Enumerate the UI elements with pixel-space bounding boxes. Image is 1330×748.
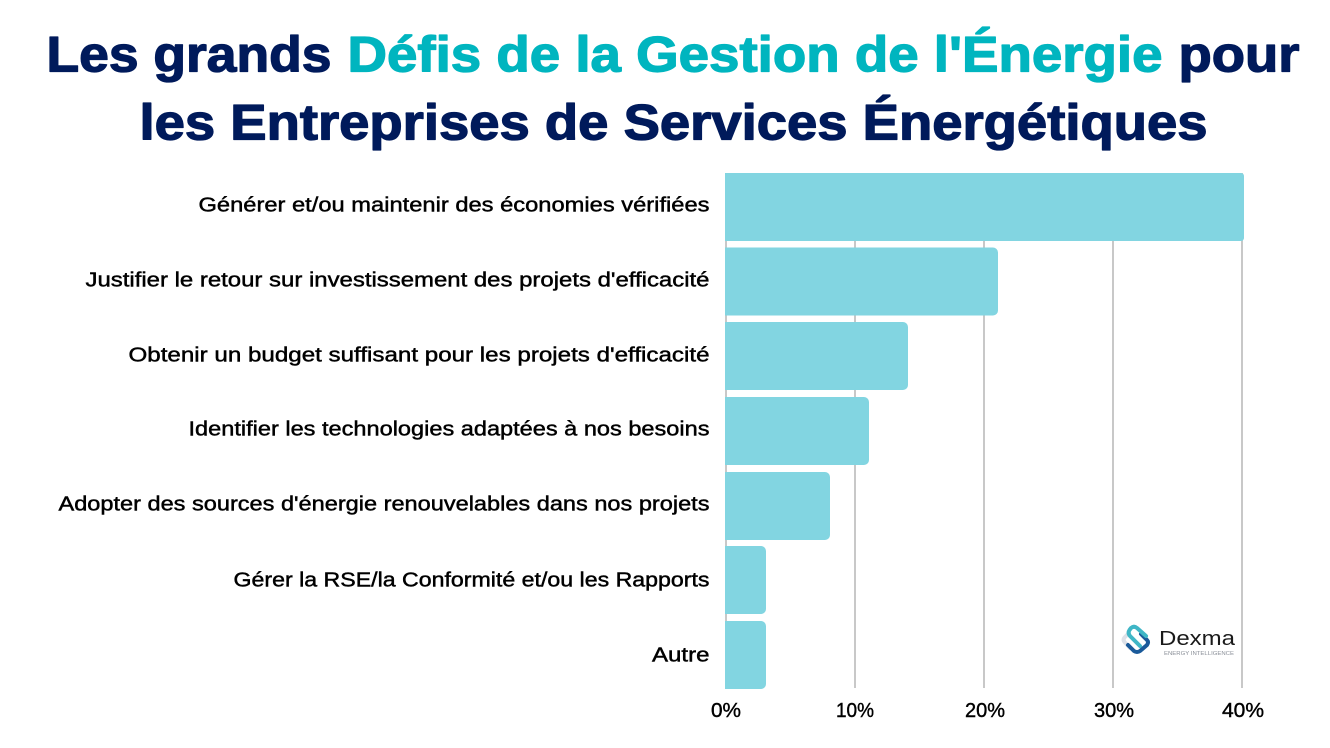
- logo wordmark: Dexma: [1159, 628, 1236, 650]
- title: pour: [1178, 26, 1300, 82]
- logo tagline: ENERGY INTELLIGENCE: [1164, 651, 1235, 657]
- title: Les grands: [46, 26, 332, 82]
- category labels: Justifier le retour sur investissement des projets d'efficacité: [86, 270, 710, 292]
- category labels: Générer et/ou maintenir des économies vérifiées: [198, 194, 710, 216]
- axis labels: 0%: [711, 700, 741, 722]
- bar chart: [58, 173, 1264, 722]
- axis labels: 10%: [836, 700, 874, 722]
- category labels: Gérer la RSE/la Conformité et/ou les Rapports: [234, 570, 710, 592]
- axis labels: [711, 700, 1264, 722]
- logo: Dexma: [1115, 618, 1239, 660]
- title: les Entreprises de Services Énergétiques: [140, 94, 1208, 150]
- category labels: [58, 194, 710, 666]
- category labels: Autre: [652, 644, 710, 666]
- axis labels: 40%: [1222, 700, 1264, 722]
- category labels: Obtenir un budget suffisant pour les projets d'efficacité: [128, 344, 710, 366]
- title: [46, 26, 1300, 150]
- category labels: Identifier les technologies adaptées à nos besoins: [188, 418, 710, 440]
- title: Défis de la Gestion de l'Énergie: [348, 26, 1162, 82]
- bars: [725, 173, 1244, 689]
- axis labels: 30%: [1094, 700, 1134, 722]
- axis labels: 20%: [965, 700, 1005, 722]
- icon: logo mark: [1124, 627, 1148, 652]
- category labels: Adopter des sources d'énergie renouvelables dans nos projets: [58, 494, 710, 516]
